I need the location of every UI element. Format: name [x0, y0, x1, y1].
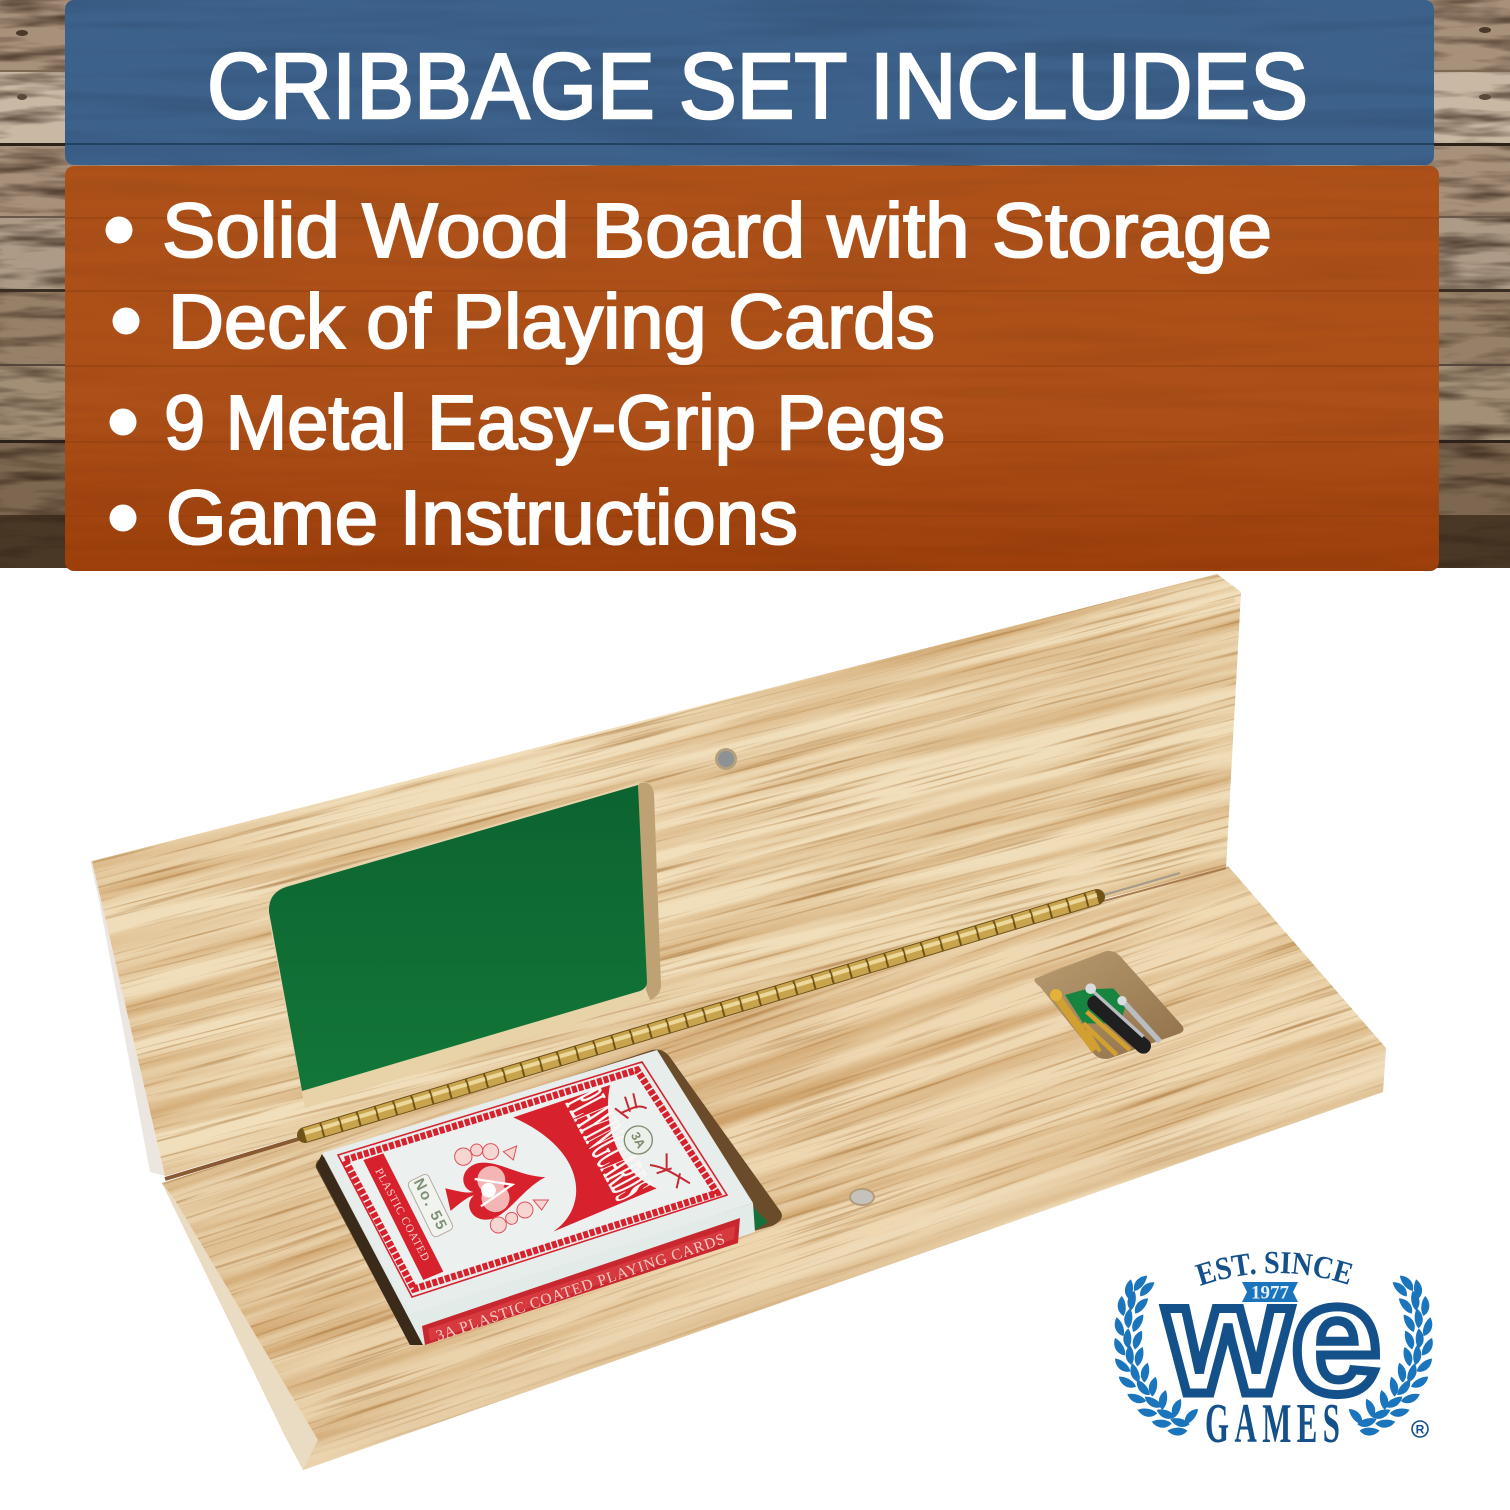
spade emblem	[441, 1149, 552, 1227]
registered mark	[1412, 1421, 1428, 1437]
title: CRIBBAGE SET INCLUDES	[207, 34, 1308, 138]
silver pegs	[1085, 983, 1160, 1042]
3A seal: 3A	[628, 1130, 648, 1151]
flowers	[455, 1144, 548, 1233]
plastic coated band	[363, 1153, 443, 1280]
board lid	[90, 574, 1241, 1176]
est since arc text	[1194, 1252, 1352, 1286]
laurel left	[1111, 1272, 1200, 1436]
card felt	[752, 1206, 768, 1230]
list item: solid wood board: Solid Wood Board with Storage	[162, 188, 1272, 274]
list item: instructions: Game Instructions	[166, 475, 798, 561]
centre hourglass	[513, 1085, 657, 1232]
card slot	[316, 1049, 782, 1345]
peg storage slot	[1034, 951, 1183, 1059]
felt in slot	[1065, 988, 1127, 1023]
list item: deck of cards: Deck of Playing Cards	[168, 279, 935, 365]
box face	[322, 1050, 753, 1314]
panel: orange contents list	[65, 166, 1439, 571]
est since arc text: EST. SINCE	[1194, 1252, 1352, 1286]
box side: 3A PLASTIC COATED PLAYING CARDS	[434, 1231, 727, 1345]
magnet in base	[850, 1189, 874, 1205]
games wordmark: GAMES	[1205, 1392, 1345, 1454]
board base	[162, 866, 1386, 1470]
box side	[322, 1153, 755, 1345]
number plate: No. 55	[410, 1176, 450, 1233]
1977 ribbon: 1977	[1251, 1282, 1290, 1304]
hinge	[305, 873, 1180, 1135]
felt recess	[268, 782, 661, 1108]
laurel right	[1347, 1272, 1436, 1436]
black peg	[1095, 1003, 1143, 1046]
1977 ribbon	[1242, 1282, 1298, 1304]
plastic coated band: PLASTIC COATED	[372, 1166, 431, 1263]
playing card box	[316, 1049, 782, 1345]
we wordmark: we	[1164, 1248, 1381, 1427]
list item: metal pegs: 9 Metal Easy-Grip Pegs	[164, 380, 945, 466]
cribbage board photo	[77, 558, 1413, 1491]
panel: blue title banner	[65, 0, 1434, 165]
tree sprigs	[615, 1093, 690, 1188]
3A seal	[624, 1126, 652, 1154]
logo: WE Games	[1114, 1248, 1433, 1454]
gold pegs	[1050, 989, 1130, 1055]
registered mark: R	[1416, 1422, 1425, 1436]
magnet in lid	[715, 748, 737, 770]
wood plank backdrop	[0, 0, 1510, 568]
slot shadow	[316, 1154, 423, 1345]
